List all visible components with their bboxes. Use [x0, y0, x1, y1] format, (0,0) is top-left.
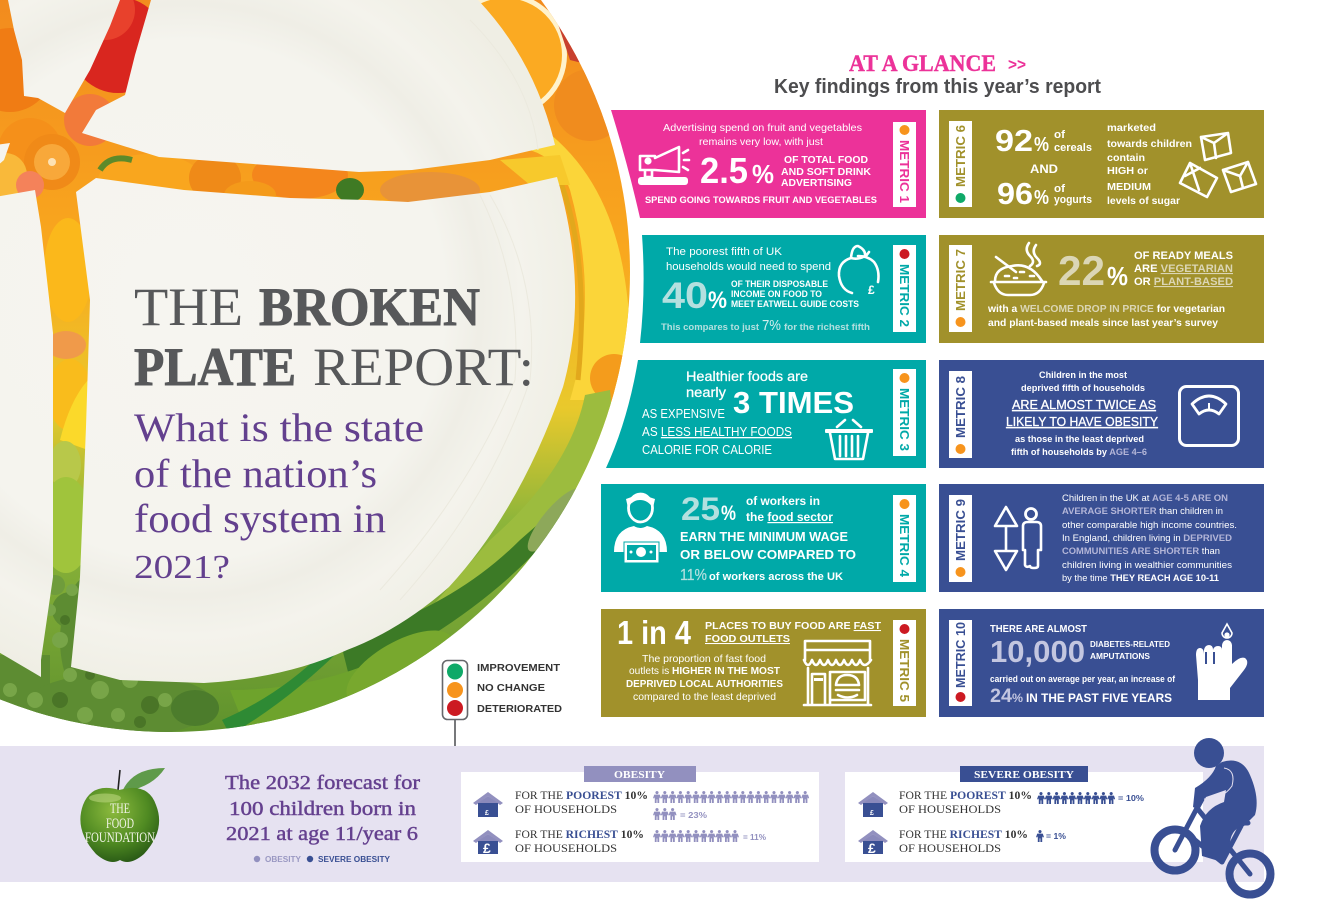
text: of workers across the UK — [709, 571, 843, 583]
icon: worker with banknote — [614, 494, 667, 563]
metric tab 10: METRIC 10 — [954, 622, 968, 688]
icon: house richest — [858, 830, 888, 856]
panel: metric 8 — [939, 360, 1264, 468]
text — [1006, 370, 1159, 458]
text — [1062, 493, 1237, 584]
label richest: OF HOUSEHOLDS — [515, 843, 617, 855]
text: remains very low, with just — [699, 136, 823, 148]
text: AND SOFT DRINK — [781, 166, 871, 178]
text: OF TOTAL FOOD — [784, 154, 868, 166]
heading: at a glance — [774, 51, 1101, 98]
text: as those in the least deprived — [1015, 434, 1144, 445]
metric tab 4: METRIC 4 — [897, 514, 911, 577]
pictogram: poorest severe 10%: = 10% — [1118, 793, 1144, 803]
text: COMMUNITIES ARE SHORTER than — [1062, 546, 1220, 557]
forecast key: OBESITY — [265, 855, 302, 864]
panel: severe obesity — [845, 766, 1203, 862]
text: of workers in — [746, 494, 820, 508]
obesity tab — [584, 766, 696, 782]
heading: at a glance: >> — [1008, 55, 1026, 74]
right banana and orange slices — [478, 0, 628, 402]
text: by the time THEY REACH AGE 10-11 — [1062, 573, 1220, 584]
text: 1 in 4 — [617, 614, 692, 651]
logo: the food foundation apple — [80, 768, 165, 862]
pictogram: richest severe 1% — [1036, 830, 1066, 842]
legend: traffic light — [442, 660, 562, 747]
icon: house richest: £ — [868, 840, 876, 856]
text: marketed — [1107, 122, 1156, 134]
text: The proportion of fast food — [642, 653, 766, 665]
text: INCOME ON FOOD TO — [731, 289, 822, 299]
forecast heading — [225, 772, 420, 845]
photo: broken plate on fruit and vegetables — [0, 0, 650, 750]
forecast key: SEVERE OBESITY — [318, 855, 391, 864]
icon: apple with pound: £ — [868, 283, 875, 297]
icon: apple with pound — [839, 246, 878, 297]
panel: metric 7 — [939, 235, 1264, 343]
text: ARE ALMOST TWICE AS — [1012, 398, 1156, 412]
icon: house richest — [473, 830, 503, 856]
text: 40 — [662, 275, 708, 316]
left column yellow peppers and apple — [44, 218, 88, 573]
forecast heading: The 2032 forecast for — [225, 772, 420, 794]
text: towards children — [1107, 138, 1192, 150]
icon: height arrow and child — [995, 507, 1041, 570]
text: and plant-based meals since last year’s survey — [988, 317, 1218, 329]
panel: obesity — [461, 766, 819, 862]
text: PLACES TO BUY FOOD ARE FAST — [705, 620, 882, 632]
text: 96 — [997, 176, 1033, 211]
icon: house poorest: £ — [870, 810, 874, 817]
pictogram: poorest obesity 23% — [653, 791, 809, 820]
text: cereals — [1054, 142, 1092, 154]
metric tab 5 — [893, 620, 916, 706]
subtitle: of the nation’s — [134, 451, 377, 496]
subtitle: What is the state — [134, 405, 424, 450]
pictogram: richest obesity 11%: = 11% — [743, 832, 766, 842]
icon: basket — [825, 420, 873, 459]
label poorest: OF HOUSEHOLDS — [899, 804, 1001, 816]
text: carried out on average per year, an increase of — [990, 674, 1176, 684]
icon: megaphone — [638, 147, 689, 185]
text: Advertising spend on fruit and vegetables — [663, 122, 862, 134]
subtitle: 2021? — [134, 549, 230, 586]
plate shards — [0, 0, 575, 683]
top left oranges — [0, 0, 149, 198]
panel: metric 3 — [606, 360, 926, 468]
text: This compares to just — [661, 322, 760, 333]
metric tab 6: METRIC 6 — [954, 125, 968, 187]
metric tab 3: METRIC 3 — [897, 388, 911, 451]
text: OR BELOW COMPARED TO — [680, 547, 856, 562]
metric tab 7: METRIC 7 — [954, 249, 968, 311]
severe obesity tab — [960, 766, 1088, 782]
label poorest — [899, 790, 1032, 816]
text: CALORIE FOR CALORIE — [642, 442, 772, 457]
pictogram: richest severe 1%: = 1% — [1046, 831, 1066, 841]
text: 10,000 — [990, 634, 1085, 669]
text: Children in the most — [1039, 370, 1128, 381]
label richest — [899, 829, 1028, 855]
panel: metric 1 — [611, 110, 926, 218]
icon: house richest: £ — [483, 840, 491, 856]
panel: metric 6 — [939, 110, 1264, 218]
pictogram: poorest severe 10% — [1037, 792, 1144, 804]
legend: traffic light: DETERIORATED — [477, 703, 562, 715]
text: % — [1012, 691, 1023, 705]
title — [134, 277, 534, 397]
forecast key — [254, 855, 391, 864]
legend: traffic light: NO CHANGE — [477, 682, 545, 694]
panel: metric 4 — [601, 484, 926, 592]
severe obesity tab: SEVERE OBESITY — [974, 769, 1074, 781]
text: for the richest fifth — [784, 322, 870, 333]
text: HIGH or — [1107, 165, 1148, 177]
plate rim ridges — [380, 148, 538, 600]
obesity tab: OBESITY — [614, 769, 665, 781]
text: FOOD OUTLETS — [705, 633, 790, 645]
metric tab 5: METRIC 5 — [897, 639, 911, 702]
text: OR PLANT-BASED — [1134, 276, 1233, 288]
text: AS EXPENSIVE — [642, 406, 725, 421]
metric tab 6 — [949, 121, 972, 207]
text: contain — [1107, 152, 1145, 164]
text: deprived fifth of households — [1021, 383, 1145, 394]
text: AMPUTATIONS — [1090, 652, 1151, 661]
title: THE — [134, 277, 243, 337]
text: 24 — [990, 686, 1012, 707]
text — [995, 122, 1192, 211]
label richest: FOR THE RICHEST 10% — [515, 829, 644, 841]
text: outlets is HIGHER IN THE MOST — [629, 665, 781, 677]
text: IN THE PAST FIVE YEARS — [1026, 691, 1172, 705]
metric tab 8 — [949, 371, 972, 458]
text: children living in wealthier communities — [1062, 560, 1232, 571]
text: MEET EATWELL GUIDE COSTS — [731, 299, 859, 309]
text — [661, 246, 870, 334]
text — [990, 624, 1176, 707]
metric tab 2 — [893, 245, 916, 332]
logo: the food foundation apple: FOOD — [106, 816, 134, 832]
text: % — [1034, 187, 1049, 209]
label richest — [515, 829, 644, 855]
text — [617, 614, 882, 703]
text: 92 — [995, 123, 1033, 158]
icon: child on bicycle — [1154, 738, 1270, 894]
metric tab 3 — [893, 369, 916, 456]
logo: the food foundation apple: THE — [110, 801, 130, 817]
text: ADVERTISING — [781, 177, 852, 189]
legend: traffic light: IMPROVEMENT — [477, 662, 561, 674]
text: THERE ARE ALMOST — [990, 624, 1087, 635]
text: The poorest fifth of UK — [666, 246, 783, 258]
crack fruits — [98, 154, 480, 202]
title: REPORT: — [313, 337, 534, 397]
text — [645, 122, 877, 206]
text: fifth of households by AGE 4–6 — [1011, 447, 1147, 458]
text: In England, children living in DEPRIVED — [1062, 533, 1232, 544]
label richest: OF HOUSEHOLDS — [899, 843, 1001, 855]
panel: metric 5 — [601, 609, 926, 717]
metric tab 4 — [893, 495, 916, 582]
forecast heading: 100 children born in — [229, 798, 416, 820]
text: Children in the UK at AGE 4-5 ARE ON — [1062, 493, 1228, 504]
text: % — [752, 159, 774, 189]
icon: house poorest — [858, 792, 888, 817]
metric tab 8: METRIC 8 — [954, 376, 968, 438]
logo: the food foundation apple: FOUNDATION — [85, 830, 155, 846]
text: levels of sugar — [1107, 195, 1180, 207]
icon: finger prick hand — [1196, 624, 1247, 700]
title: PLATE — [134, 337, 296, 397]
text: SPEND GOING TOWARDS FRUIT AND VEGETABLES — [645, 195, 877, 206]
metric tab 1 — [893, 122, 916, 207]
label poorest: FOR THE POOREST 10% — [515, 790, 648, 802]
text: households would need to spend — [666, 261, 831, 273]
text: OF READY MEALS — [1134, 250, 1233, 262]
text: % — [1034, 134, 1049, 156]
subtitle — [134, 405, 424, 586]
panel: metric 9 — [939, 484, 1264, 592]
text: 3 TIMES — [733, 385, 854, 420]
icon: fast food shop — [804, 641, 871, 705]
text — [987, 247, 1233, 329]
icon: weighing scale — [1180, 386, 1238, 446]
metric tab 2: METRIC 2 — [897, 264, 911, 327]
text: EARN THE MINIMUM WAGE — [680, 529, 848, 544]
icon: sugar cubes — [1180, 133, 1256, 197]
panel: metric 2 — [640, 235, 926, 343]
label poorest — [515, 790, 648, 816]
icon: house poorest — [473, 792, 503, 817]
text: MEDIUM — [1107, 181, 1151, 193]
title: BROKEN — [259, 277, 480, 337]
text: % — [721, 502, 736, 525]
metric tab 10 — [949, 620, 972, 706]
greens lower right — [222, 390, 611, 740]
text: nearly — [686, 385, 726, 400]
text: AVERAGE SHORTER than children in — [1062, 506, 1223, 517]
text: Healthier foods are — [686, 369, 808, 384]
label poorest: OF HOUSEHOLDS — [515, 804, 617, 816]
label richest: FOR THE RICHEST 10% — [899, 829, 1028, 841]
heading: at a glance: Key findings from this year’s report — [774, 76, 1101, 98]
heading: at a glance: AT A GLANCE — [849, 51, 996, 76]
text: % — [1107, 261, 1128, 291]
text: 2.5 — [700, 150, 748, 191]
text: % — [708, 287, 727, 314]
text: ARE VEGETARIAN — [1134, 263, 1233, 275]
text: other comparable high income countries. — [1062, 520, 1237, 531]
label poorest: FOR THE POOREST 10% — [899, 790, 1032, 802]
text: with a WELCOME DROP IN PRICE for vegetarian — [987, 303, 1225, 315]
text: LIKELY TO HAVE OBESITY — [1006, 415, 1159, 429]
text: yogurts — [1054, 194, 1092, 206]
text — [642, 369, 854, 457]
pictogram: richest obesity 11% — [653, 830, 766, 842]
metric tab 9 — [949, 495, 972, 582]
metric tab 7 — [949, 245, 972, 332]
text: the food sector — [746, 510, 833, 524]
metric tab 9: METRIC 9 — [954, 499, 968, 561]
broccoli — [0, 570, 219, 737]
pictogram: poorest obesity 23%: = 23% — [680, 810, 707, 820]
forecast heading: 2021 at age 11/year 6 — [226, 823, 418, 845]
text: OF THEIR DISPOSABLE — [731, 279, 828, 289]
panel: forecast band — [0, 746, 1264, 882]
panel: metric 10 — [939, 609, 1264, 717]
text: of — [1054, 183, 1065, 195]
text: DIABETES-RELATED — [1090, 640, 1170, 649]
icon: house poorest: £ — [485, 810, 489, 817]
text: AND — [1030, 162, 1058, 176]
subtitle: food system in — [134, 496, 386, 541]
text: compared to the least deprived — [633, 691, 776, 703]
icon: bowl of food — [991, 243, 1046, 295]
text: AS LESS HEALTHY FOODS — [642, 424, 792, 439]
metric tab 1: METRIC 1 — [897, 140, 911, 203]
text: 25 — [681, 491, 720, 527]
text: of — [1054, 129, 1065, 141]
text: 22 — [1058, 247, 1105, 294]
text: 7% — [762, 317, 781, 334]
text: 11% — [680, 567, 707, 584]
text: DEPRIVED LOCAL AUTHORITIES — [626, 678, 783, 690]
text — [680, 491, 856, 584]
